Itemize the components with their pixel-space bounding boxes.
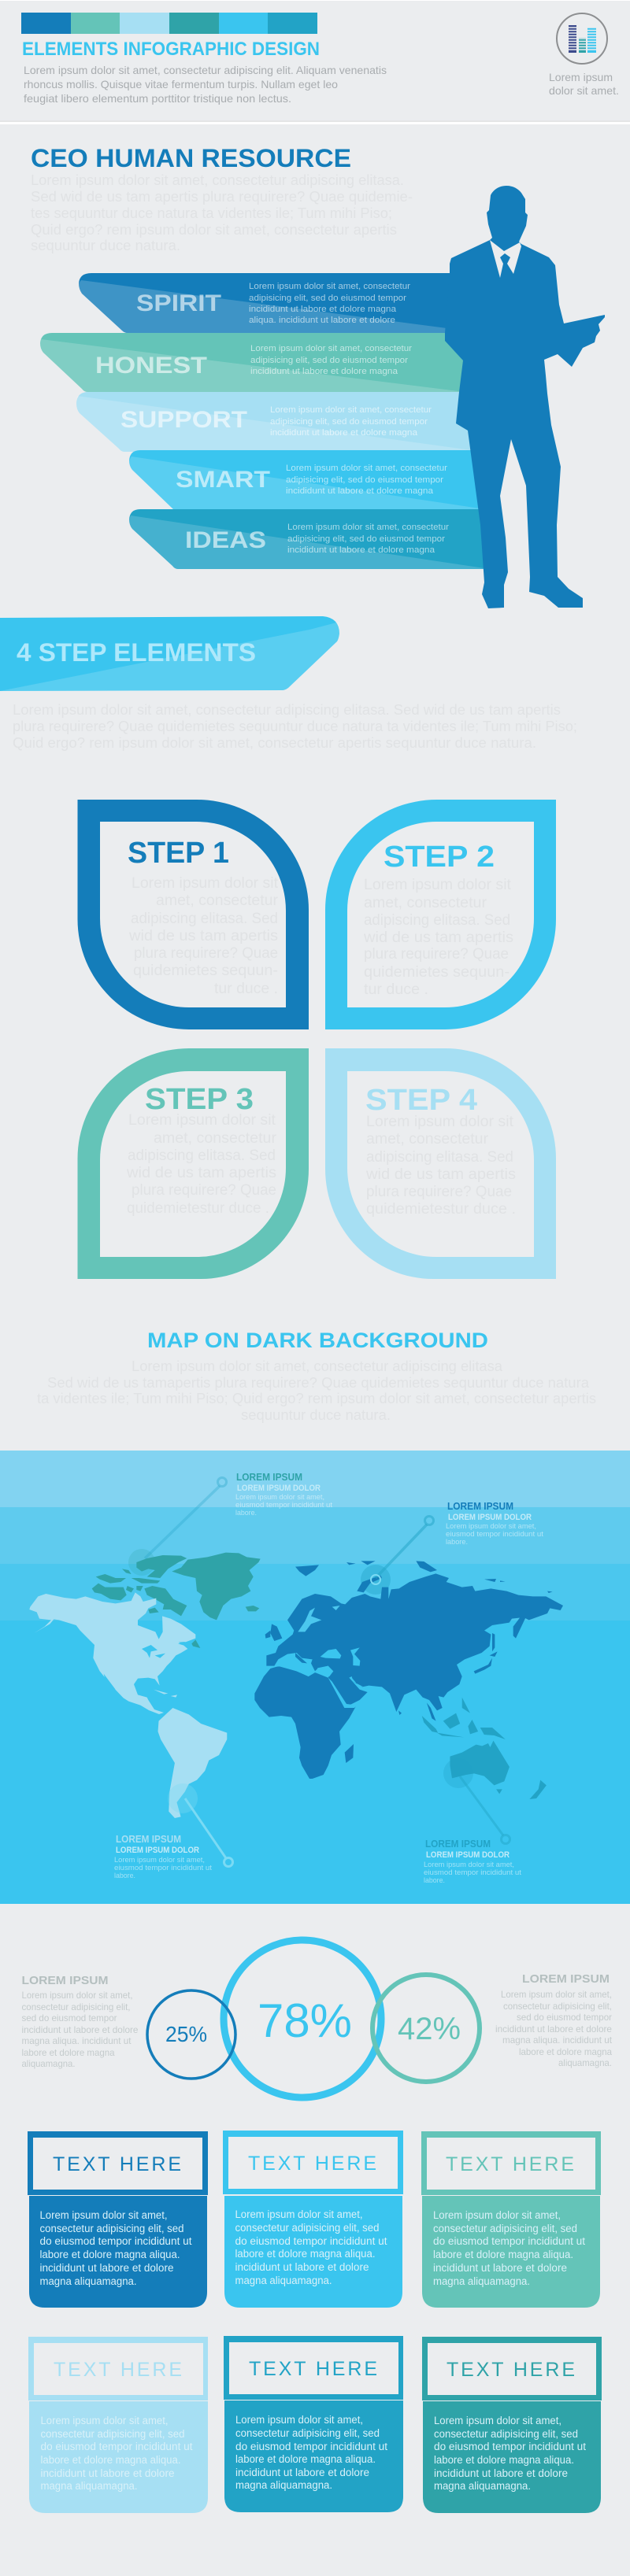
card 4: Lorem ipsum dolor sit amet, bbox=[41, 2415, 169, 2426]
map intro text bbox=[37, 1358, 596, 1423]
map pin: south america bbox=[168, 1783, 233, 1867]
CEO intro text bbox=[31, 172, 413, 253]
header intro text: rhoncus mollis. Quisque vitae fermentum turpis. Nullam eget leo bbox=[24, 78, 338, 91]
map label: east: labore. bbox=[446, 1538, 468, 1547]
banner: ideas: IDEAS bbox=[185, 527, 266, 553]
map label: east: Lorem ipsum dolor sit amet, bbox=[446, 1522, 536, 1531]
banner: smart: incididunt ut labore et dolore magna bbox=[286, 486, 434, 496]
card 2: do eiusmod tempor incididunt ut bbox=[235, 2235, 387, 2247]
step 2: Lorem ipsum dolor sit bbox=[364, 877, 512, 893]
card 5: Lorem ipsum dolor sit amet, bbox=[235, 2414, 363, 2426]
step 1: adipiscing elitasa. Sed bbox=[131, 911, 278, 927]
map pin glow: north bbox=[128, 1549, 155, 1576]
step 2 bbox=[325, 800, 556, 1029]
4 step intro text: plura requirere? Quae quidemietes sequuntur duce natura ta videntes ile; Tum mihi Piso; bbox=[13, 719, 577, 734]
banner: honest: incididunt ut labore et dolore magna bbox=[250, 367, 398, 376]
card 2: consectetur adipisicing elit, sed bbox=[235, 2222, 380, 2234]
card 1 bbox=[28, 2131, 208, 2308]
step 3: Lorem ipsum dolor sit bbox=[128, 1112, 276, 1129]
4 step intro text: Lorem ipsum dolor sit amet, consectetur adipiscing elitasa. Sed wid de us tam apertis bbox=[13, 702, 561, 718]
map label: australia bbox=[424, 1838, 521, 1885]
step 2: adipiscing elitasa. Sed bbox=[364, 912, 510, 929]
map intro text: Lorem ipsum dolor sit amet, consectetur adipiscing elitasa bbox=[132, 1358, 503, 1374]
map label: east: LOREM IPSUM bbox=[447, 1500, 513, 1512]
stats text: right: LOREM IPSUM bbox=[522, 1972, 610, 1986]
card 3: do eiusmod tempor incididunt ut bbox=[433, 2235, 585, 2247]
stats text: right: magna aliqua. incididunt ut bbox=[502, 2035, 613, 2046]
banner: support: Lorem ipsum dolor sit amet, consectetur bbox=[270, 405, 432, 415]
step 2: wid de us tam apertis bbox=[363, 930, 513, 946]
map label: north: LOREM IPSUM DOLOR bbox=[237, 1484, 321, 1493]
map pin: east bbox=[371, 1516, 433, 1584]
step 1: Lorem ipsum dolor sit bbox=[132, 875, 279, 892]
card 6: Lorem ipsum dolor sit amet, bbox=[434, 2415, 561, 2426]
step 2: STEP 2 bbox=[384, 841, 495, 874]
circle: 42%: 42% bbox=[398, 2012, 461, 2046]
4 step intro text: Quid ergo? rem ipsum dolor sit amet, consectetur apertis sequuntur duce natura. bbox=[13, 735, 536, 751]
card 2: magna aliquamagna. bbox=[235, 2275, 332, 2286]
card 2 bbox=[223, 2131, 403, 2308]
card 1: incididunt ut labore et dolore bbox=[39, 2262, 173, 2274]
step 3: adipiscing elitasa. Sed bbox=[128, 1148, 276, 1164]
card 4: TEXT HERE bbox=[54, 2359, 182, 2381]
card 5: magna aliquamagna. bbox=[235, 2479, 332, 2491]
stats text: right: labore et dolore magna bbox=[519, 2046, 612, 2057]
card 3 bbox=[421, 2131, 601, 2308]
banner: spirit: SPIRIT bbox=[136, 290, 221, 316]
icon: equalizer in circle bbox=[557, 13, 607, 64]
step 4: STEP 4 bbox=[365, 1084, 477, 1117]
map label: south america: LOREM IPSUM bbox=[116, 1833, 181, 1845]
card 5 bbox=[224, 2336, 403, 2512]
banner: smart: SMART bbox=[176, 467, 270, 493]
stats text: left: LOREM IPSUM bbox=[22, 1974, 109, 1987]
4 step intro text bbox=[13, 702, 577, 751]
circle: 78% bbox=[224, 1940, 381, 2097]
world map panel bbox=[0, 1451, 630, 1904]
card 1: labore et dolore magna aliqua. bbox=[39, 2249, 180, 2260]
card 2: labore et dolore magna aliqua. bbox=[235, 2248, 375, 2260]
card 5: consectetur adipisicing elit, sed bbox=[235, 2427, 380, 2439]
step 3: wid de us tam apertis bbox=[126, 1165, 276, 1181]
map pin: australia bbox=[443, 1758, 510, 1843]
circle: 25% bbox=[147, 1990, 235, 2079]
map label: east: eiusmod tempor incididunt ut bbox=[446, 1530, 543, 1539]
map label: south america: eiusmod tempor incididunt ut bbox=[114, 1864, 212, 1872]
step 4 bbox=[325, 1048, 556, 1279]
stats text: left: Lorem ipsum dolor sit amet, bbox=[22, 1990, 132, 2001]
banner: support: incididunt ut labore et dolore magna bbox=[270, 428, 418, 438]
stats text: right: sed do eiusmod tempor bbox=[517, 2012, 612, 2023]
step 1: amet, consectetur bbox=[156, 893, 279, 909]
banner: ideas: incididunt ut labore et dolore magna bbox=[287, 545, 435, 555]
step 4: wid de us tam apertis bbox=[365, 1166, 516, 1183]
card 1: consectetur adipisicing elit, sed bbox=[39, 2223, 184, 2234]
card 1: TEXT HERE bbox=[53, 2153, 181, 2175]
banner: ideas: adipisicing elit, sed do eiusmod tempor bbox=[287, 534, 445, 544]
map label: south america: labore. bbox=[114, 1872, 135, 1880]
map label: australia: LOREM IPSUM DOLOR bbox=[426, 1850, 510, 1860]
card 5: incididunt ut labore et dolore bbox=[235, 2467, 369, 2478]
card 4: consectetur adipisicing elit, sed bbox=[41, 2428, 184, 2440]
step 1: plura requirere? Quae bbox=[134, 945, 278, 962]
map pin: north bbox=[145, 1478, 227, 1558]
step 4: quidemietestur duce . bbox=[366, 1201, 516, 1218]
card 3: TEXT HERE bbox=[446, 2153, 574, 2175]
card 4: labore et dolore magna aliqua. bbox=[41, 2454, 181, 2466]
banner: honest: adipisicing elit, sed do eiusmod tempor bbox=[250, 356, 408, 365]
banner: ideas bbox=[129, 509, 490, 569]
map pin glow: east bbox=[361, 1565, 391, 1595]
businessman silhouette bbox=[445, 186, 605, 608]
map label: south america: Lorem ipsum dolor sit amet, bbox=[114, 1856, 205, 1865]
header intro text: Lorem ipsum dolor sit amet, consectetur adipiscing elit. Aliquam venenatis bbox=[24, 64, 387, 76]
step 1: wid de us tam apertis bbox=[128, 928, 278, 944]
card 6: incididunt ut labore et dolore bbox=[434, 2467, 568, 2479]
CEO intro text: Sed wid de us tam apertis plura requirere? Quae quidemie- bbox=[31, 189, 413, 205]
card 2: TEXT HERE bbox=[248, 2153, 376, 2175]
card 2: incididunt ut labore et dolore bbox=[235, 2261, 369, 2273]
banner: honest bbox=[40, 333, 465, 392]
step 4: Lorem ipsum dolor sit bbox=[366, 1114, 514, 1130]
header colour palette bbox=[21, 13, 317, 34]
circle: 25%: 25% bbox=[165, 2022, 207, 2046]
icon caption bbox=[549, 71, 619, 97]
banner: smart: Lorem ipsum dolor sit amet, consectetur bbox=[286, 464, 447, 473]
stats text: left bbox=[22, 1974, 139, 2069]
step 2: amet, consectetur bbox=[364, 895, 487, 911]
header intro text: feugiat libero elementum porttitor tristique non lectus. bbox=[24, 92, 291, 105]
map label: north bbox=[235, 1471, 332, 1517]
card 5: do eiusmod tempor incididunt ut bbox=[235, 2441, 387, 2452]
map label: east bbox=[446, 1500, 543, 1547]
card 5: labore et dolore magna aliqua. bbox=[235, 2453, 376, 2465]
CEO intro text: Quid ergo? rem ipsum dolor sit amet, consectetur apertis bbox=[31, 222, 397, 238]
card 6 bbox=[422, 2337, 602, 2513]
map label: australia: eiusmod tempor incididunt ut bbox=[424, 1868, 521, 1877]
card 1: magna aliquamagna. bbox=[39, 2275, 137, 2287]
map label: australia: LOREM IPSUM bbox=[425, 1838, 491, 1850]
banner: 4 step elements: 4 STEP ELEMENTS bbox=[17, 638, 256, 667]
map label: australia: labore. bbox=[424, 1876, 445, 1885]
step 3 bbox=[77, 1048, 309, 1279]
circle: 42% bbox=[372, 1975, 480, 2082]
step 2: quidemietes sequun- bbox=[364, 964, 510, 981]
step 4: plura requirere? Quae bbox=[366, 1184, 512, 1200]
stats text: left: aliquamagna. bbox=[22, 2058, 76, 2069]
card 3: incididunt ut labore et dolore bbox=[433, 2262, 567, 2274]
banner: 4 step elements bbox=[0, 616, 339, 691]
stats text: left: consectetur adipisicing elit, bbox=[22, 2001, 131, 2012]
card 4: incididunt ut labore et dolore bbox=[41, 2467, 175, 2479]
map intro text: Sed wid de us tamapertis plura requirere? Quae quidemietes sequuntur duce natura bbox=[47, 1375, 590, 1391]
card 6: do eiusmod tempor incididunt ut bbox=[434, 2441, 586, 2452]
banner: smart: adipisicing elit, sed do eiusmod tempor bbox=[286, 475, 443, 485]
CEO intro text: sequuntur duce natura. bbox=[31, 238, 180, 253]
CEO intro text: Lorem ipsum dolor sit amet, consectetur adipiscing elitasa. bbox=[31, 172, 404, 188]
stats text: right: aliquamagna. bbox=[558, 2057, 612, 2068]
card 4: magna aliquamagna. bbox=[41, 2480, 137, 2492]
stats text: right: Lorem ipsum dolor sit amet, bbox=[501, 1989, 612, 2000]
step 3: amet, consectetur bbox=[154, 1130, 277, 1147]
circle: 78%: 78% bbox=[258, 1994, 352, 2047]
CEO intro text: tes sequuntur duce natura ta videntes ile; Tum mihi Piso; bbox=[31, 205, 392, 221]
card 4 bbox=[28, 2337, 208, 2513]
title: ELEMENTS INFOGRAPHIC DESIGN bbox=[22, 39, 320, 60]
map label: australia: Lorem ipsum dolor sit amet, bbox=[424, 1861, 514, 1869]
banner: spirit bbox=[79, 273, 453, 333]
banner: honest: Lorem ipsum dolor sit amet, consectetur bbox=[250, 344, 412, 353]
map intro text: ta videntes ile; Tum mihi Piso; Quid ergo? rem ipsum dolor sit amet, consectetur apertis bbox=[37, 1391, 596, 1406]
card 5: TEXT HERE bbox=[249, 2358, 377, 2380]
card 1: Lorem ipsum dolor sit amet, bbox=[39, 2209, 167, 2221]
stats text: left: incididunt ut labore et dolore bbox=[22, 2024, 139, 2035]
step 4: adipiscing elitasa. Sed bbox=[366, 1149, 513, 1166]
step 1: quidemietes sequun- bbox=[133, 963, 278, 979]
map intro text: sequuntur duce natura. bbox=[241, 1407, 391, 1423]
card 2: Lorem ipsum dolor sit amet, bbox=[235, 2208, 362, 2220]
step 3: STEP 3 bbox=[145, 1083, 254, 1116]
card 6: TEXT HERE bbox=[447, 2359, 575, 2381]
card 3: consectetur adipisicing elit, sed bbox=[433, 2223, 577, 2234]
map label: north: LOREM IPSUM bbox=[236, 1471, 302, 1483]
banner: ideas: Lorem ipsum dolor sit amet, consectetur bbox=[287, 523, 449, 532]
continents: eurasia and africa bbox=[254, 1561, 563, 1779]
card 6: labore et dolore magna aliqua. bbox=[434, 2454, 574, 2466]
card 3: magna aliquamagna. bbox=[433, 2275, 530, 2287]
map label: north: Lorem ipsum dolor sit amet, bbox=[235, 1493, 324, 1502]
card 4: do eiusmod tempor incididunt ut bbox=[41, 2441, 193, 2452]
icon caption: Lorem ipsum bbox=[549, 71, 613, 83]
map label: north: labore. bbox=[235, 1509, 257, 1517]
banner: support bbox=[76, 392, 477, 452]
stats text: right: incididunt ut labore et dolore bbox=[495, 2023, 612, 2035]
banner: spirit: aliqua. incididunt ut labore et dolore bbox=[249, 316, 395, 325]
map label: north: eiusmod tempor incididunt ut bbox=[235, 1501, 332, 1510]
map label: south america: LOREM IPSUM DOLOR bbox=[116, 1846, 199, 1855]
header intro text bbox=[24, 64, 387, 105]
banner: spirit: Lorem ipsum dolor sit amet, consectetur bbox=[249, 282, 410, 291]
banner: support: adipisicing elit, sed do eiusmod tempor bbox=[270, 417, 428, 427]
step 4: amet, consectetur bbox=[366, 1131, 489, 1148]
card 1: do eiusmod tempor incididunt ut bbox=[39, 2235, 192, 2247]
map label: south america bbox=[114, 1833, 212, 1880]
banner: honest: HONEST bbox=[95, 353, 207, 379]
stats text: left: magna aliqua. incididunt ut bbox=[22, 2035, 132, 2046]
stats text: right: consectetur adipisicing elit, bbox=[503, 2001, 612, 2012]
card 6: magna aliquamagna. bbox=[434, 2480, 531, 2492]
banner: spirit: incididunt ut labore et dolore magna bbox=[249, 305, 397, 314]
banner: spirit: adipisicing elit, sed do eiusmod tempor bbox=[249, 294, 406, 303]
map label: east: LOREM IPSUM DOLOR bbox=[448, 1513, 532, 1522]
continents: south pacific bbox=[158, 1698, 547, 1818]
icon caption: dolor sit amet. bbox=[549, 84, 619, 97]
heading: map on dark background: MAP ON DARK BACKGROUND bbox=[147, 1329, 488, 1352]
card 3: Lorem ipsum dolor sit amet, bbox=[433, 2209, 561, 2221]
step 3: plura requirere? Quae bbox=[132, 1182, 276, 1199]
stats text: right bbox=[495, 1972, 613, 2068]
banner: smart bbox=[129, 450, 485, 509]
heading: CEO human resource: CEO HUMAN RESOURCE bbox=[31, 144, 351, 172]
step 2: plura requirere? Quae bbox=[364, 946, 509, 963]
step 1: STEP 1 bbox=[128, 837, 229, 870]
card 3: labore et dolore magna aliqua. bbox=[433, 2249, 573, 2260]
step 1: tur duce . bbox=[214, 981, 278, 997]
banner: support: SUPPORT bbox=[120, 407, 247, 433]
stats text: left: labore et dolore magna bbox=[22, 2047, 115, 2058]
step 2: tur duce . bbox=[364, 981, 428, 998]
step 3: quidemietestur duce . bbox=[127, 1200, 269, 1217]
stats text: left: sed do eiusmod tempor bbox=[22, 2012, 117, 2023]
continents: americas and arctic bbox=[29, 1553, 261, 1714]
step 1 bbox=[77, 800, 309, 1029]
card 6: consectetur adipisicing elit, sed bbox=[434, 2428, 578, 2440]
